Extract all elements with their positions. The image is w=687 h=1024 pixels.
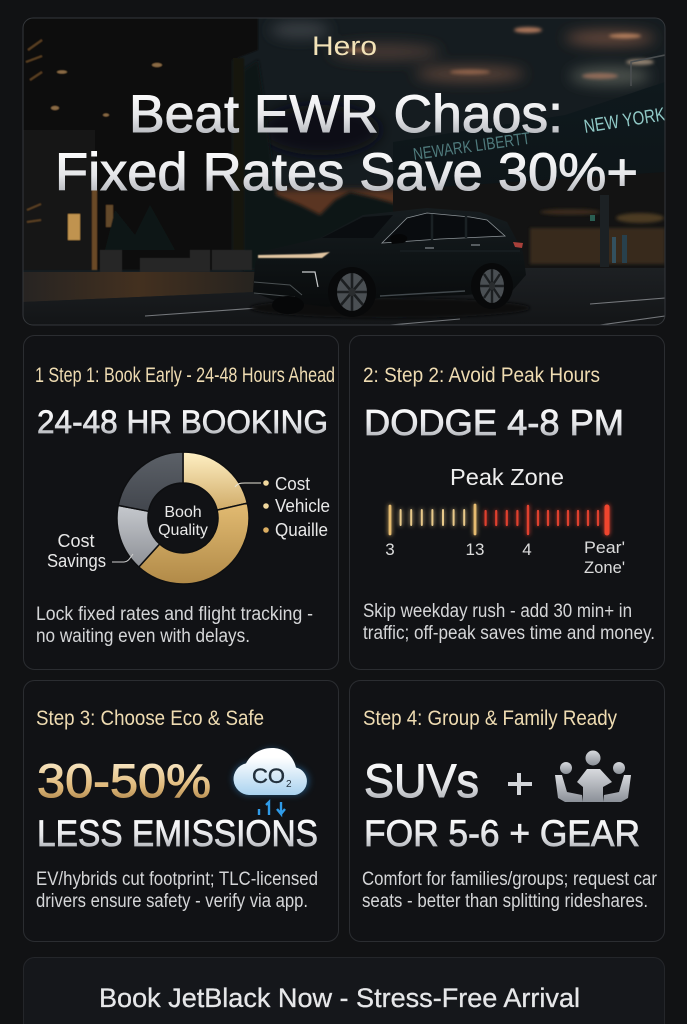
step 2 body: traffic; off-peak saves time and money. <box>363 623 655 644</box>
step 4 body <box>362 869 658 912</box>
step 1 body: Lock fixed rates and flight tracking - <box>36 604 313 625</box>
step 1 body <box>36 604 313 647</box>
step 1 body: no waiting even with delays. <box>36 626 250 647</box>
donut callout: cost savings: Savings <box>47 551 106 571</box>
call to action panel <box>24 958 664 1024</box>
step 1 heading: 1 Step 1: Book Early - 24-48 Hours Ahead <box>35 364 335 387</box>
icon: CO2 cloud: 2 <box>286 779 292 790</box>
step 3 stat: 30-50% <box>37 754 211 807</box>
donut legend: Quaille <box>275 520 328 540</box>
peak zone title: Peak Zone <box>450 464 564 490</box>
step 4 body: Comfort for families/groups; request car <box>362 869 658 890</box>
scale labels <box>385 538 625 577</box>
terminal <box>393 86 656 190</box>
step 2 heading: 2: Step 2: Avoid Peak Hours <box>363 364 600 387</box>
donut chart <box>117 452 249 584</box>
lights <box>258 252 330 258</box>
panel: step 1 <box>24 336 338 670</box>
sidewalk <box>23 272 255 302</box>
plus sign <box>508 773 532 795</box>
peak zone scale <box>385 505 625 577</box>
hero title: Fixed Rates Save 30%+ <box>55 143 638 202</box>
panel: step 4 <box>350 680 664 942</box>
panel: hero <box>23 18 667 325</box>
scale labels: Zone' <box>584 558 625 577</box>
wheels <box>272 296 296 314</box>
terminal signs: NEW YORK <box>582 104 667 138</box>
step 4 stat: SUVs <box>364 754 479 807</box>
scale labels: 13 <box>466 540 484 559</box>
hero photo: car at Newark airport at dusk: NEWARK LIBERTT <box>412 129 531 164</box>
step 1 stat: 24-48 HR BOOKING <box>37 404 328 440</box>
donut legend: Vehicle <box>275 496 330 516</box>
scale labels: Pear' <box>584 538 625 557</box>
scale labels: 3 <box>385 540 395 559</box>
step 2 stat: DODGE 4-8 PM <box>364 402 624 443</box>
donut callout: cost savings <box>47 531 133 571</box>
step 4 body: seats - better than splitting rideshares. <box>362 891 648 912</box>
donut centre label <box>158 504 208 539</box>
black SUV <box>250 208 530 318</box>
icon: CO2 cloud: CO <box>252 765 285 788</box>
left building <box>23 18 258 279</box>
hero title <box>55 85 638 202</box>
step 3 body <box>36 869 318 912</box>
step 3 subhead: LESS EMISSIONS <box>37 813 318 854</box>
step 4 subhead: FOR 5-6 + GEAR <box>364 813 640 854</box>
call to action text: Book JetBlack Now - Stress-Free Arrival <box>99 983 580 1013</box>
panel: step 3 <box>24 680 338 942</box>
trees <box>243 60 400 270</box>
step 3 body: drivers ensure safety - verify via app. <box>36 891 308 912</box>
donut centre label: Quality <box>158 522 208 539</box>
icon: CO2 cloud <box>233 748 309 815</box>
step 4 heading: Step 4: Group & Family Ready <box>363 707 617 730</box>
hero label: Hero <box>312 31 377 61</box>
scale labels: 4 <box>522 540 532 559</box>
donut legend <box>235 474 330 540</box>
hero title: Beat EWR Chaos: <box>129 85 563 144</box>
donut centre label: Booh <box>164 504 202 521</box>
step 2 body: Skip weekday rush - add 30 min+ in <box>363 601 632 622</box>
donut callout: cost savings: Cost <box>57 531 95 551</box>
step 3 body: EV/hybrids cut footprint; TLC-licensed <box>36 869 318 890</box>
step 3 heading: Step 3: Choose Eco & Safe <box>36 707 264 730</box>
icon: group of people <box>555 750 631 802</box>
windows <box>322 215 393 238</box>
donut legend: Cost <box>275 474 310 494</box>
road <box>26 296 662 324</box>
hero photo: car at Newark airport at dusk <box>23 18 667 325</box>
panel: step 2 <box>350 336 664 670</box>
step 2 body <box>363 601 655 644</box>
